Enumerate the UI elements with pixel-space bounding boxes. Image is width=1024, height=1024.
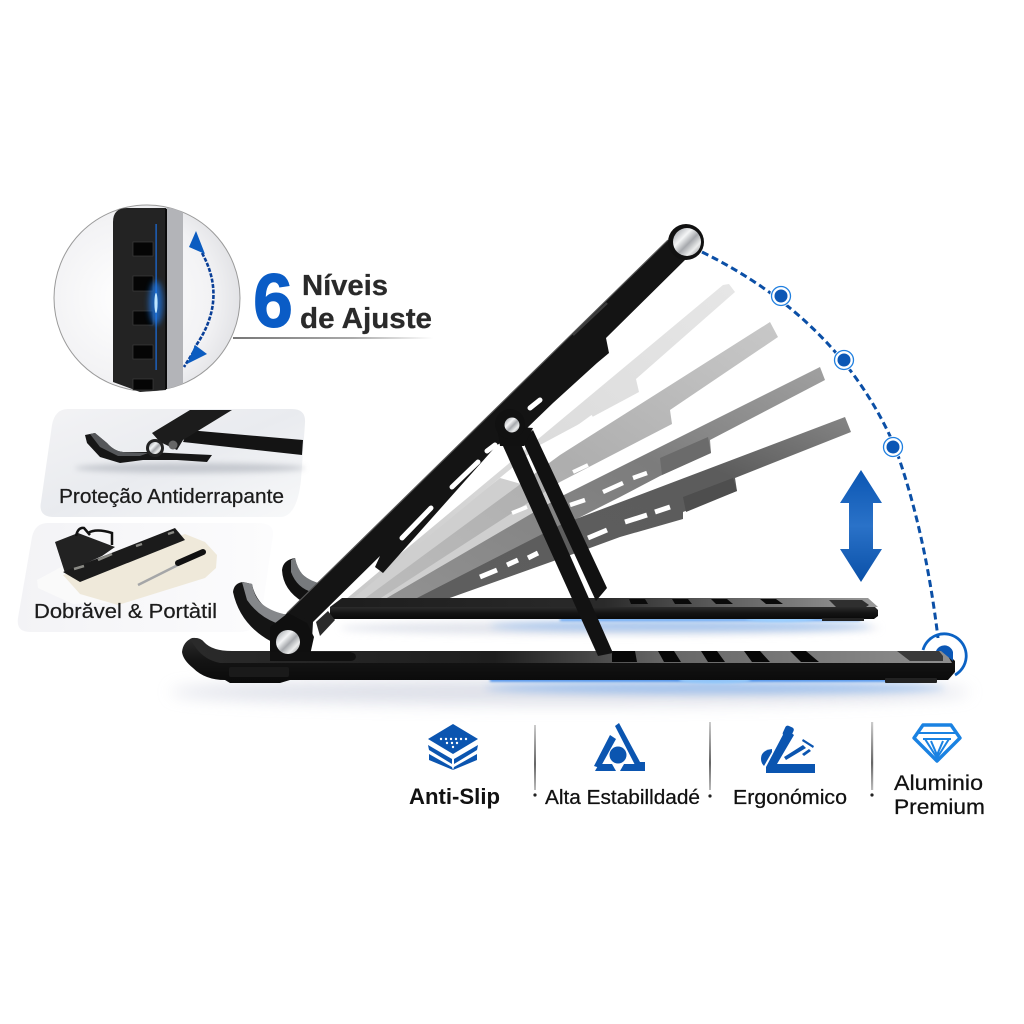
- ghost position 2: [360, 322, 778, 605]
- panel: Proteção Antiderrapante: [41, 409, 305, 517]
- main arm: [233, 240, 687, 661]
- foot shadow: [75, 463, 305, 473]
- screwdriver: [138, 565, 178, 585]
- panel: Dobrável & Portátil: [18, 523, 273, 632]
- ground shadow: [170, 621, 970, 704]
- heading: 6 Níveis de Ajuste: Níveis: [302, 270, 388, 302]
- icon: layers: [428, 724, 478, 770]
- end marker ring: [923, 634, 966, 675]
- folded black plate: [63, 528, 185, 582]
- rear hook: [282, 558, 325, 602]
- label: Anti-Slip: [409, 784, 500, 809]
- foot illustration: [85, 410, 303, 463]
- arc markers: [770, 285, 904, 458]
- arm body: [270, 240, 687, 640]
- icon: ergonomic: [761, 725, 815, 773]
- heading: 6 Níveis de Ajuste: 6: [253, 259, 293, 344]
- ghost position 1: [345, 284, 735, 605]
- ghost backing fill: [345, 478, 560, 600]
- blue glow under front base: [485, 665, 945, 694]
- adjust arrows: [184, 231, 213, 367]
- arm slots: [402, 400, 540, 538]
- dark bar: [113, 208, 166, 392]
- cream tray: [63, 534, 217, 605]
- separator 3: [870, 722, 874, 797]
- dashed arc: [702, 252, 938, 638]
- hinge block: [270, 613, 314, 655]
- carry bag: [55, 533, 115, 573]
- front strut: [495, 409, 613, 656]
- front base (lower): [182, 638, 955, 694]
- panel label: Proteção Antiderrapante: [59, 486, 284, 508]
- heading: 6 Níveis de Ajuste: [253, 259, 432, 344]
- hinge bolt: [276, 630, 300, 654]
- separator 1: [533, 725, 537, 797]
- panel: 6 levels lens: [54, 205, 240, 398]
- blue light: [149, 224, 163, 370]
- top knob: [668, 224, 704, 260]
- icon: triangle stability: [594, 723, 645, 771]
- bar slots: [133, 242, 153, 390]
- ghost position 4: [417, 417, 851, 605]
- label: Ergonómico: [733, 787, 847, 809]
- rear base (upper): [330, 598, 878, 631]
- panel label: Dobrăvel & Portàtil: [34, 601, 217, 623]
- heading rule: [233, 337, 433, 339]
- rear strut: [522, 430, 607, 601]
- feature: Anti-Slip: [409, 724, 500, 809]
- feature: Aluminio Premium: [894, 725, 985, 819]
- icon: diamond: [914, 725, 960, 761]
- separator 2: [708, 722, 712, 798]
- ghost position 3: [380, 367, 825, 602]
- ghost positions of the stand: [345, 284, 851, 605]
- feature: Alta Estabilidade: [545, 723, 700, 809]
- feature: Aluminio Premium: Premium: [894, 796, 985, 819]
- label: Alta Estabilldadé: [545, 787, 700, 809]
- white box: [37, 565, 130, 604]
- double arrow: [840, 470, 882, 582]
- label: Aluminio: [894, 772, 983, 795]
- blue glow under rear base: [490, 616, 870, 631]
- feature: Ergonómico: [733, 725, 847, 809]
- lower hook: [233, 582, 310, 642]
- heading: 6 Níveis de Ajuste: de Ajuste: [300, 303, 432, 335]
- strut bolt: [504, 418, 520, 432]
